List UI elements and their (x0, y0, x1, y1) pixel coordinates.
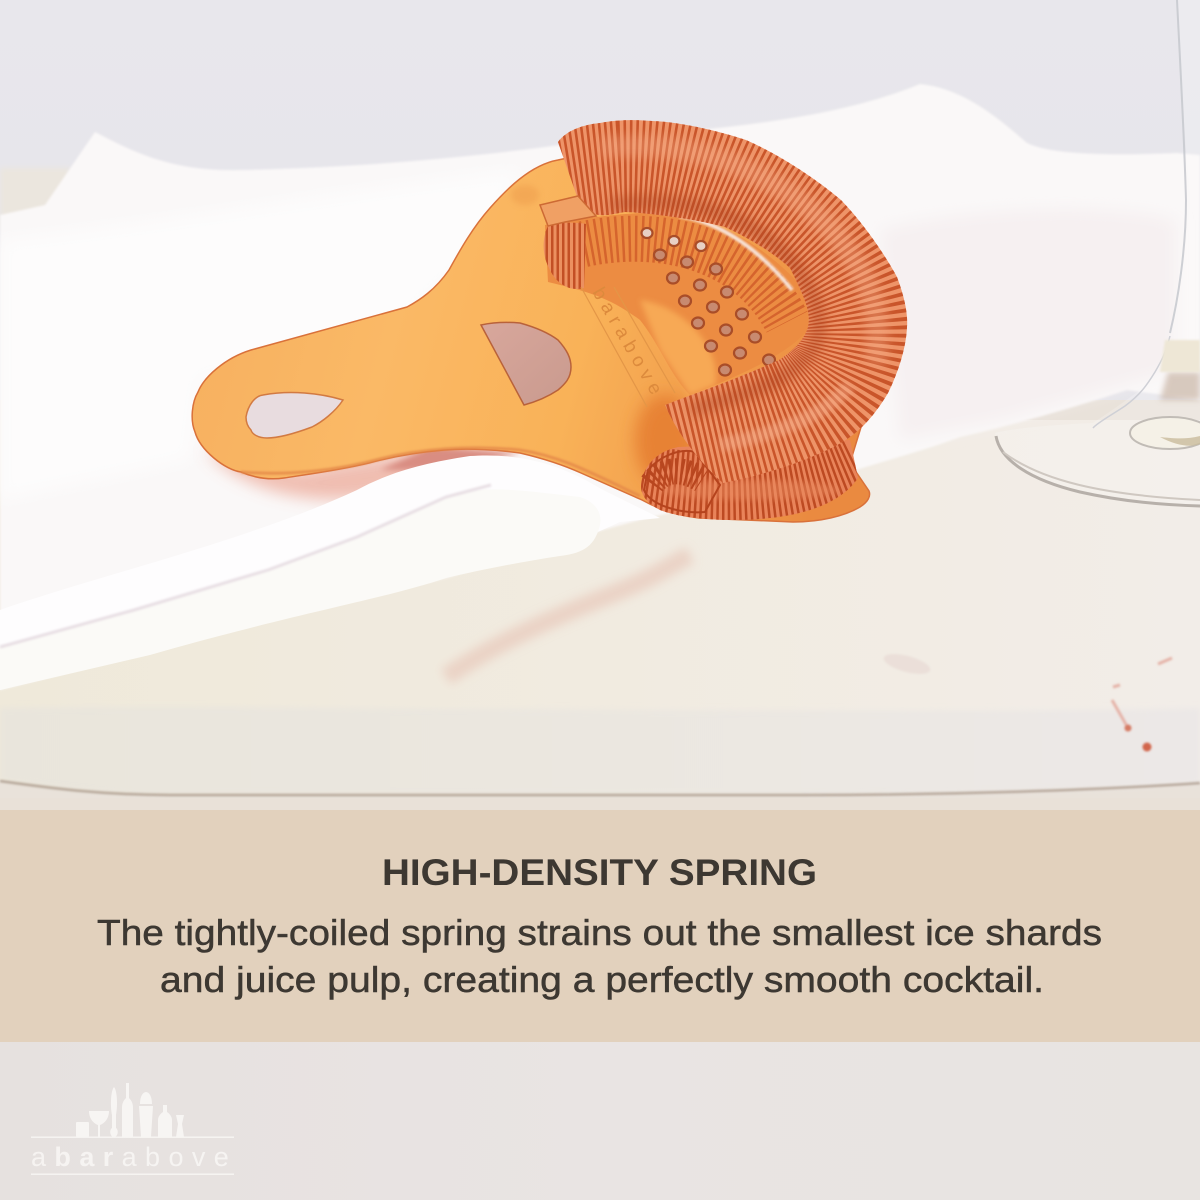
logo: a bar above (31, 1083, 237, 1175)
napkin (0, 84, 1200, 690)
lower spring coil (641, 440, 858, 520)
caption band (0, 810, 1200, 1042)
napkin front flap (0, 489, 600, 690)
main spring coil (558, 120, 908, 483)
bottom marble strip (0, 1042, 1200, 1200)
spring end curl (644, 451, 720, 512)
photo scene (0, 0, 1200, 810)
logo rules (31, 1136, 234, 1138)
spring clip (540, 196, 596, 226)
background wall (0, 0, 1200, 810)
napkin upper fold (0, 455, 660, 690)
description text: and juice pulp, creating a perfectly smooth cocktail. (160, 959, 1044, 1000)
marble vein (446, 555, 690, 677)
logo icon: bar bottles (76, 1083, 184, 1137)
description text: The tightly-coiled spring strains out the smallest ice shards (97, 912, 1102, 953)
description text (97, 912, 1102, 1000)
strainer plate (192, 130, 900, 522)
marble board (0, 400, 1200, 810)
plate shading (241, 185, 695, 496)
handle teardrop hole (246, 393, 343, 438)
strainer (192, 110, 915, 525)
table behind napkin (0, 168, 70, 228)
strainer center hole (481, 322, 571, 405)
heading: HIGH-DENSITY SPRING (382, 852, 817, 893)
bowl (540, 213, 808, 395)
inner left coils (544, 222, 586, 289)
marble spots (882, 650, 1172, 752)
wine glass (995, 0, 1200, 507)
strainer holes (642, 228, 775, 376)
logo wordmark: abarabove (31, 1142, 237, 1172)
pink reflection shadow (205, 445, 520, 500)
engraved brand band: barabove (588, 284, 666, 398)
